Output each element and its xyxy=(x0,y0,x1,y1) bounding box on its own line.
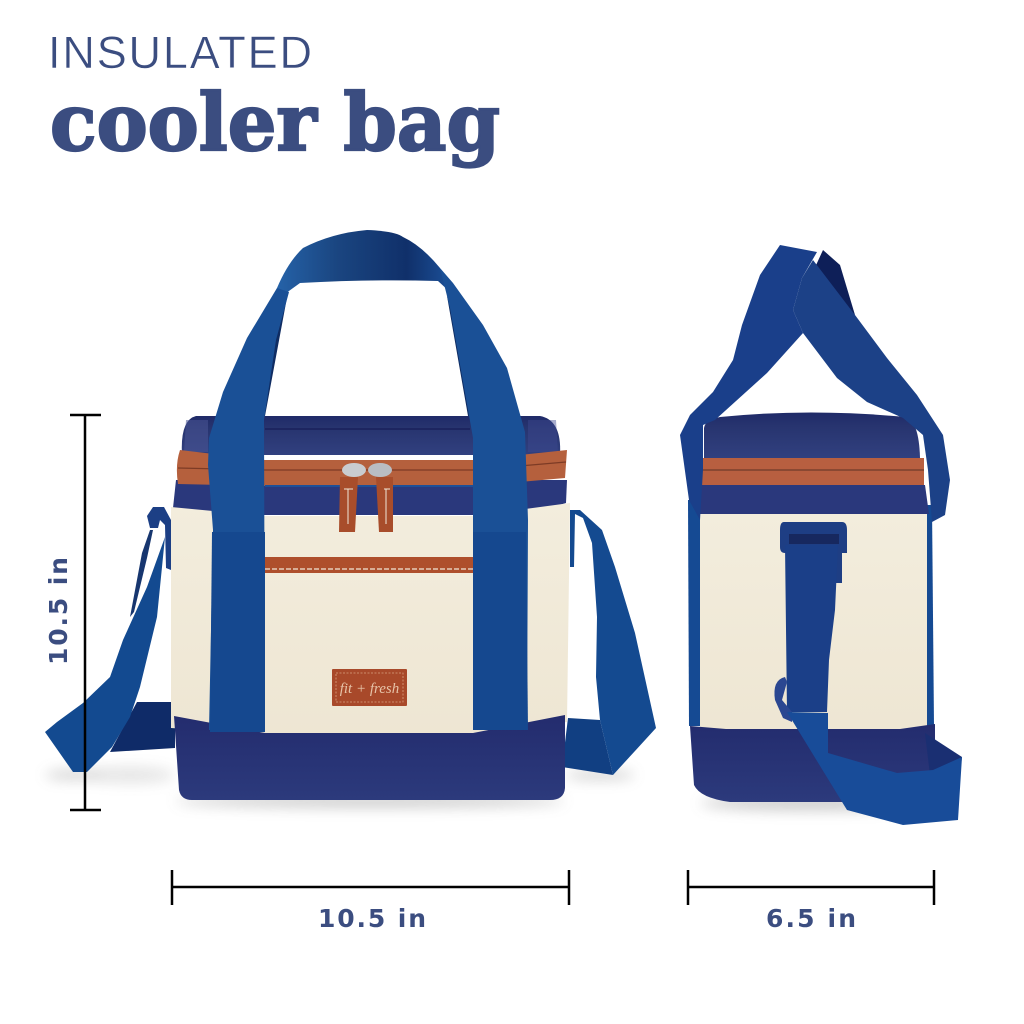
depth dimension line xyxy=(688,870,934,905)
carry handle right arm xyxy=(793,260,950,522)
left handle strap xyxy=(208,288,289,732)
ground shadows xyxy=(45,767,920,810)
bottom base xyxy=(690,724,935,802)
bottom base xyxy=(174,715,565,800)
brand patch: fit + fresh xyxy=(340,681,399,697)
pocket trim xyxy=(265,557,473,573)
lid xyxy=(704,412,920,458)
handle inner shaded sides xyxy=(255,292,477,416)
title line: cooler bag: cooler bag xyxy=(50,76,500,169)
bag lid xyxy=(182,416,560,455)
handle arch xyxy=(277,230,450,296)
right handle strap xyxy=(440,268,528,730)
carry handle left arm xyxy=(680,245,817,520)
strap lower xyxy=(787,712,962,825)
handle back fold xyxy=(800,250,855,315)
navy zip band xyxy=(700,485,929,514)
cream body xyxy=(171,503,570,734)
navy zip band xyxy=(173,480,567,515)
width label: 10.5 in xyxy=(318,904,426,933)
zipper pulls xyxy=(339,463,393,532)
handle stitching panel left xyxy=(210,532,265,732)
panel: side view of cooler bag xyxy=(680,245,962,825)
cream body xyxy=(700,514,927,730)
width dimension line xyxy=(172,870,569,905)
title xyxy=(48,27,500,169)
shoulder strap right xyxy=(562,510,656,775)
title line: INSULATED: INSULATED xyxy=(48,27,312,78)
brand patch xyxy=(332,669,407,706)
strap tail back xyxy=(925,733,962,790)
side panel right edge xyxy=(924,505,934,726)
depth label: 6.5 in xyxy=(766,904,856,933)
strap loop xyxy=(774,677,792,722)
shoulder strap left xyxy=(45,507,175,772)
side panel left edge xyxy=(688,500,702,726)
height label: 10.5 in xyxy=(44,557,73,665)
orange zipper band xyxy=(702,458,924,486)
vertical strap xyxy=(785,545,838,712)
buckle xyxy=(780,522,847,583)
orange zipper band xyxy=(177,450,567,486)
handle stitching panel right xyxy=(473,532,528,730)
height dimension line xyxy=(70,415,101,810)
panel: front view of cooler bag xyxy=(45,230,656,800)
